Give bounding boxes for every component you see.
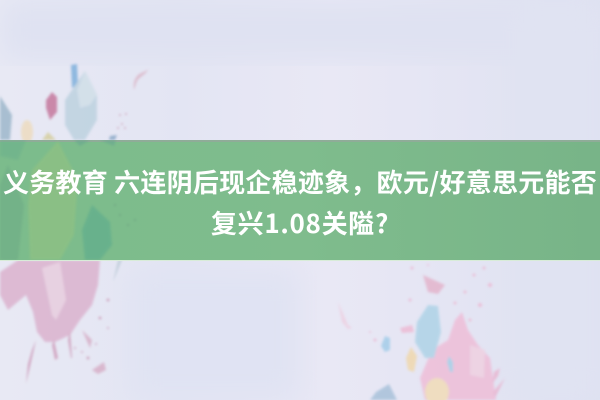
band shapes xyxy=(0,140,136,260)
pink splash and crystals bottom right xyxy=(338,264,505,400)
pink splash bottom left xyxy=(0,260,122,384)
title text xyxy=(3,163,597,241)
title text: 复兴1.08关隘? xyxy=(211,204,389,241)
title text: 义务教育 六连阴后现企稳迹象，欧元/好意思元能否 xyxy=(3,163,597,200)
crystals top left xyxy=(0,64,148,144)
title band xyxy=(0,140,600,260)
